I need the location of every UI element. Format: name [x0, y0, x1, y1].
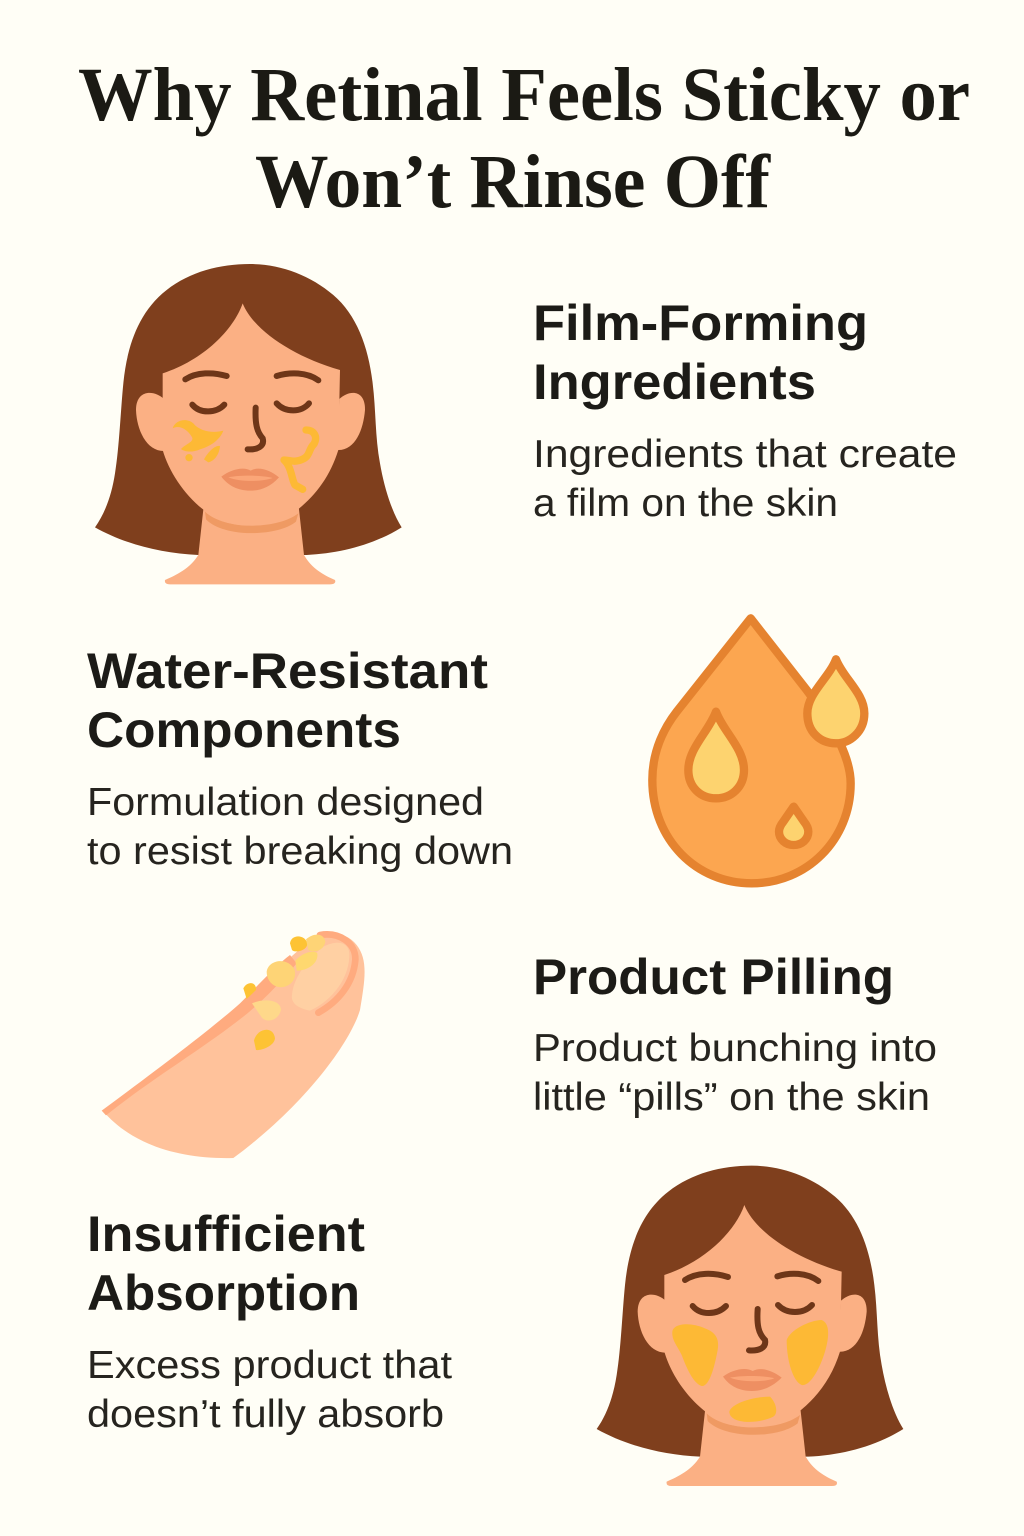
heading and text: water-resistant components: Water-Resistant: [87, 643, 488, 699]
heading and text: water-resistant components: Formulation designed: [87, 781, 484, 824]
heading and text: film-forming ingredients: Ingredients that create: [533, 433, 957, 476]
neck: [165, 503, 335, 584]
sticky film left cheek: [173, 420, 223, 452]
icon: fingertip with pilled product: [102, 934, 365, 1158]
title: Why Retinal Feels Sticky or: [78, 53, 970, 137]
heading and text: film-forming ingredients: [533, 295, 957, 525]
ears: [638, 1295, 667, 1353]
icon: face with excess unabsorbed product: [597, 1166, 903, 1486]
heading and text: film-forming ingredients: Ingredients: [533, 354, 816, 410]
neck shadow: [707, 1413, 800, 1435]
title: Won’t Rinse Off: [255, 140, 772, 224]
heading and text: water-resistant components: [87, 643, 513, 873]
heading and text: insufficient absorption: Absorption: [87, 1265, 360, 1321]
heading and text: insufficient absorption: doesn’t fully absorb: [87, 1393, 444, 1436]
lips: [221, 469, 279, 491]
heading and text: water-resistant components: Components: [87, 702, 401, 758]
heading and text: film-forming ingredients: a film on the skin: [533, 482, 838, 525]
finger edge: [102, 955, 297, 1115]
neck shadow: [205, 512, 298, 533]
heading and text: product pilling: little “pills” on the skin: [533, 1076, 930, 1119]
inner left droplet: [688, 712, 744, 798]
product patch chin: [729, 1397, 776, 1422]
heading and text: product pilling: Product Pilling: [533, 949, 894, 1005]
eyebrows, eyes and nose: [685, 1274, 818, 1350]
product patch left cheek: [672, 1324, 718, 1386]
icon: oil drops: [652, 618, 864, 883]
title: [78, 53, 970, 224]
small droplet: [779, 807, 808, 845]
large drop: [652, 618, 851, 883]
product patch right cheek: [787, 1320, 828, 1385]
product pills: [290, 936, 307, 951]
heading and text: water-resistant components: to resist breaking down: [87, 830, 513, 873]
eyebrows, eyes and nose: [185, 373, 318, 449]
ears: [136, 393, 165, 451]
heading and text: film-forming ingredients: Film-Forming: [533, 295, 868, 351]
nail rim: [318, 934, 355, 1013]
neck: [667, 1405, 837, 1486]
face: [163, 303, 340, 526]
face: [664, 1205, 842, 1427]
heading and text: product pilling: Product bunching into: [533, 1027, 937, 1070]
sticky film right cheek: [284, 430, 316, 489]
nail: [292, 943, 349, 1011]
lips: [723, 1369, 782, 1391]
heading and text: insufficient absorption: [87, 1206, 452, 1436]
heading and text: insufficient absorption: Excess product that: [87, 1344, 452, 1387]
icon: face with sticky film on cheeks: [95, 264, 402, 584]
upper right droplet: [807, 659, 864, 743]
heading and text: product pilling: [533, 949, 937, 1119]
heading and text: insufficient absorption: Insufficient: [87, 1206, 365, 1262]
